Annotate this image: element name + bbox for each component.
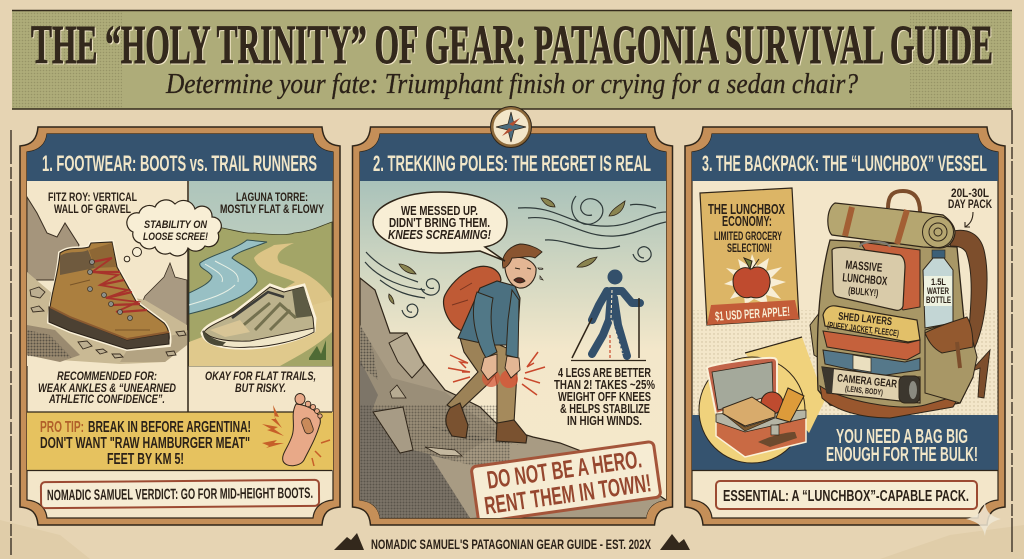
icon: backpack	[810, 191, 990, 418]
poles explanation text: WEIGHT OFF KNEES	[558, 389, 651, 404]
thought bubble: stability: LOOSE SCREE!	[143, 231, 208, 243]
icon: trail shoe	[202, 285, 315, 348]
scene: Laguna Torre trail shoe	[189, 181, 332, 366]
poster: lunchbox economy: $1 USD PER APPLE!	[715, 304, 790, 324]
head	[505, 257, 536, 288]
boots	[446, 403, 468, 438]
pro tip band	[27, 412, 333, 470]
legs	[446, 338, 494, 408]
shoulder strap	[950, 230, 987, 347]
panel 1: footwear	[20, 127, 340, 525]
caption: Laguna Torre	[220, 192, 324, 213]
caption: Fitz Roy	[48, 192, 137, 213]
icon: open lunchbox	[699, 357, 806, 463]
camera gear label: (LENS, BODY)	[845, 384, 884, 397]
zoom cone	[745, 337, 825, 433]
footer	[334, 533, 690, 552]
pro tip band: BREAK IN BEFORE ARGENTINA!	[88, 419, 251, 436]
massive lunchbox label: (BULKY!)	[848, 286, 879, 299]
dotted background	[692, 310, 998, 415]
water bottle: WATER	[927, 286, 949, 296]
verdict box: NOMADIC SAMUEL VERDICT: GO FOR MID-HEIGHT BOOTS.	[47, 485, 313, 504]
poles explanation text: & HELPS STABILIZE	[560, 401, 650, 416]
caption: trail runners	[205, 372, 316, 392]
capacity note: 20L-30L	[951, 186, 989, 200]
icon: sore foot	[262, 394, 330, 466]
poster: lunchbox economy: THE LUNCHBOX	[708, 201, 785, 218]
header banner	[12, 10, 1012, 109]
icon: apple	[733, 258, 770, 298]
caption: Laguna Torre: LAGUNA TORRE:	[236, 190, 308, 204]
poles explanation text: IN HIGH WINDS.	[567, 413, 642, 428]
caption: boots recommendation: WEAK ANKLES & “UNEARNED	[38, 381, 176, 395]
capacity note	[948, 186, 992, 227]
handle	[888, 191, 920, 212]
icon: mountains right	[660, 534, 690, 550]
panel 1 heading: 1. FOOTWEAR: BOOTS vs. TRAIL RUNNERS	[42, 151, 317, 176]
watermark sparkle	[966, 502, 1001, 536]
camera gear label	[822, 367, 920, 403]
trail path	[254, 243, 332, 305]
poster: lunchbox economy: SELECTION!	[727, 241, 772, 255]
backpack	[444, 266, 501, 331]
leaves	[389, 198, 625, 304]
subtitle: Determine your fate: Triumphant finish or crying for a sedan chair?	[165, 69, 858, 100]
poster: lunchbox economy: ECONOMY:	[722, 213, 772, 230]
footer text: NOMADIC SAMUEL'S PATAGONIAN GEAR GUIDE - EST. 202X	[371, 536, 651, 552]
camera gear label: CAMERA GEAR	[837, 372, 898, 391]
capacity note: DAY PACK	[948, 197, 992, 211]
poles explanation text: THAN 2! TAKES ~25%	[554, 377, 655, 392]
stamp callout: DO NOT BE A HERO.	[485, 445, 644, 495]
shed layers label	[823, 306, 920, 342]
speech bubble: WE MESSED UP.	[401, 203, 478, 218]
verdict box	[716, 481, 977, 509]
stamp callout: RENT THEM IN TOWN!	[483, 469, 653, 520]
shed layers label: SHED LAYERS	[838, 311, 893, 328]
water bottle: BOTTLE	[926, 295, 951, 305]
icon: compass	[490, 106, 532, 148]
knees	[482, 372, 500, 387]
pain bolts	[448, 352, 545, 395]
wind swirls	[365, 196, 666, 317]
body	[817, 240, 973, 415]
water bottle: 1.5L	[931, 277, 946, 287]
icon: hiker in pain	[444, 244, 545, 443]
wind spirals	[572, 196, 603, 224]
caption: Laguna Torre: MOSTLY FLAT & FLOWY	[220, 202, 324, 216]
jacket	[458, 281, 520, 345]
thought bubble: stability: STABILITY ON	[144, 219, 208, 231]
caption: boots recommendation: RECOMMENDED FOR:	[57, 369, 157, 383]
hands	[481, 354, 497, 380]
scene: Fitz Roy boot	[27, 181, 187, 366]
icon: hiking boot	[49, 242, 169, 349]
water bottle	[923, 250, 953, 328]
poster: lunchbox economy	[700, 188, 799, 325]
panel 2 heading bar	[360, 134, 666, 181]
caption: Fitz Roy: WALL OF GRAVEL	[54, 202, 131, 216]
side pocket	[925, 318, 977, 403]
verdict box	[41, 480, 319, 508]
speech bubble: KNEES SCREAMING!	[388, 227, 492, 242]
pro tip band: DON'T WANT "RAW HAMBURGER MEAT"	[40, 435, 250, 452]
side pocket left	[810, 312, 822, 360]
panel 1 heading bar	[27, 134, 333, 181]
stamp callout	[471, 441, 661, 522]
caption: boots recommendation: ATHLETIC CONFIDENCE”.	[48, 392, 165, 406]
panel 2 heading: 2. TREKKING POLES: THE REGRET IS REAL	[373, 151, 651, 176]
massive lunchbox label	[832, 247, 905, 310]
caption: Fitz Roy: FITZ ROY: VERTICAL	[48, 190, 137, 204]
sky and rocks scene	[360, 181, 666, 518]
pro tip band: FEET BY KM 5!	[107, 451, 184, 468]
pro tip band: PRO TIP:	[40, 419, 84, 436]
poster: lunchbox economy: LIMITED GROCERY	[714, 229, 782, 243]
river	[189, 240, 267, 314]
speech bubble: DIDN'T BRING THEM.	[389, 215, 490, 230]
shed layers label: (PUFFY JACKET, FLEECE)	[827, 320, 899, 338]
panel 2: trekking poles	[352, 127, 672, 525]
caption: trail runners: OKAY FOR FLAT TRAILS,	[205, 369, 316, 383]
caption: trail runners: BUT RISKY.	[235, 381, 286, 395]
bedroll	[828, 203, 955, 248]
icon: mountains left	[334, 533, 364, 550]
bottom brown	[820, 386, 960, 418]
poles explanation text	[554, 365, 655, 428]
panel 3 heading bar	[692, 134, 998, 181]
blue message band	[692, 415, 998, 470]
thought bubble: stability	[124, 200, 221, 262]
massive lunchbox label: MASSIVE	[845, 258, 883, 275]
orange compartment	[860, 242, 920, 310]
panel 3: backpack	[685, 127, 1005, 525]
poles explanation text: 4 LEGS ARE BETTER	[558, 365, 651, 380]
caption: boots recommendation	[38, 372, 176, 403]
icon: pole pictogram	[571, 270, 646, 360]
massive lunchbox label: LUNCHBOX	[842, 270, 888, 288]
speech bubble	[373, 192, 507, 261]
